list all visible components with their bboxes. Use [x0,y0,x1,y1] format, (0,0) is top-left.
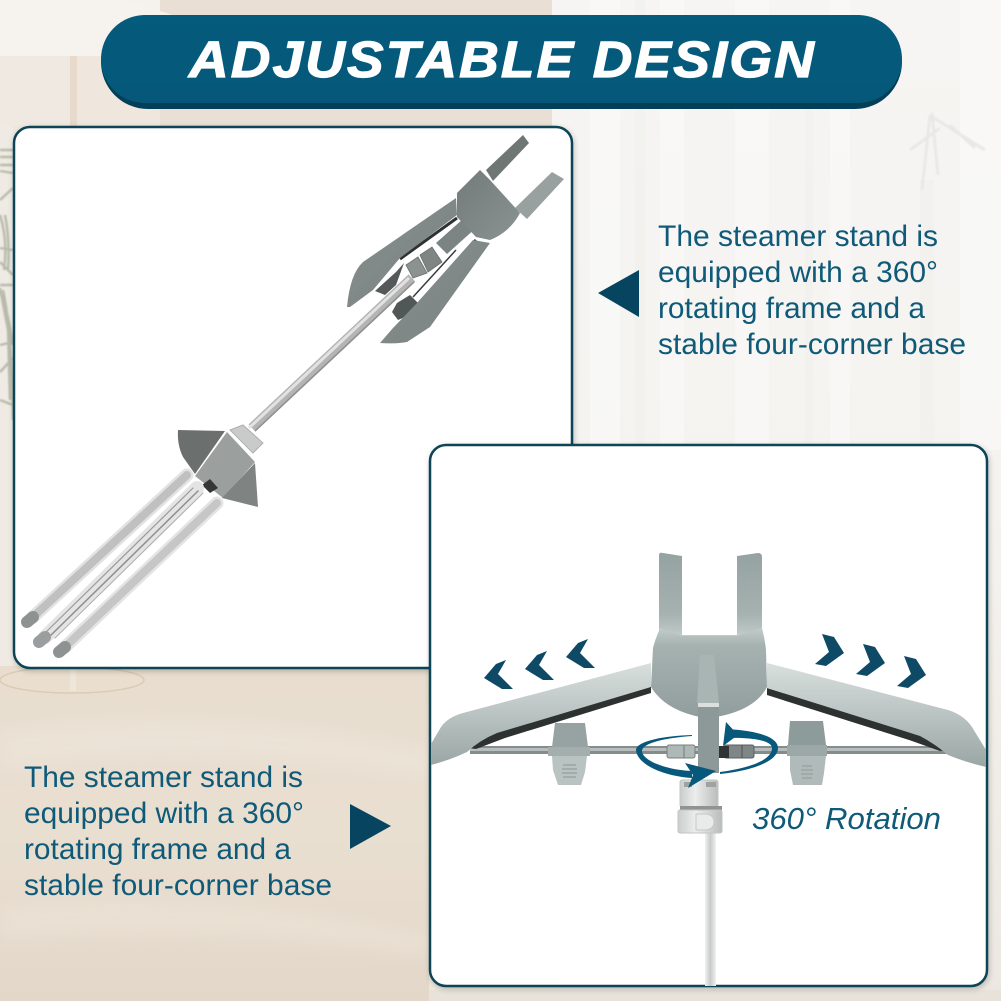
arrow: pointing left to stand photo [598,270,639,317]
callout text: top right: equipped with a 360° [658,256,938,289]
inner holder [375,263,404,295]
callout text: top right [658,220,966,361]
callout text: bottom left [24,761,332,902]
hanger head [651,553,767,717]
pole [705,833,716,986]
hanger right arm [767,663,986,767]
rotation label: 360° Rotation [752,801,941,836]
head [457,170,520,240]
chevrons right [815,634,926,688]
hanger left arm [431,663,651,765]
callout text: top right: The steamer stand is [658,220,938,253]
callout text: bottom left: equipped with a 360° [24,797,304,830]
arrow: pointing right to hanger photo [350,804,391,849]
callout text: top right: stable four-corner base [658,328,966,361]
callout text: bottom left: rotating frame and a [24,833,291,866]
connectors on bar [667,745,754,758]
swivel joint [678,780,722,833]
plant at left edge [0,150,13,420]
stand legs [27,475,217,652]
center stem [436,219,477,254]
lamp base [0,667,144,693]
callout text: top right: rotating frame and a [658,292,925,325]
wings [347,198,457,307]
callout text: bottom left: stable four-corner base [24,869,332,902]
center stem [698,703,719,773]
panel: hanger rotation photo [430,445,987,986]
hanger bar [470,746,950,754]
stand rod [249,278,414,431]
hanger head folded [347,135,564,343]
panel: folded stand product photo [14,127,572,668]
connector nuts [406,247,442,278]
prongs [486,135,529,181]
bamboo shadow [910,113,985,190]
rotation arrow [636,722,778,788]
base hub [178,425,263,507]
title text: ADJUSTABLE DESIGN [187,31,816,88]
hanger clips [548,721,827,785]
callout text: bottom left: The steamer stand is [24,761,303,794]
dark inner lines [400,218,457,259]
chevrons left [484,639,595,689]
title banner [101,15,902,109]
